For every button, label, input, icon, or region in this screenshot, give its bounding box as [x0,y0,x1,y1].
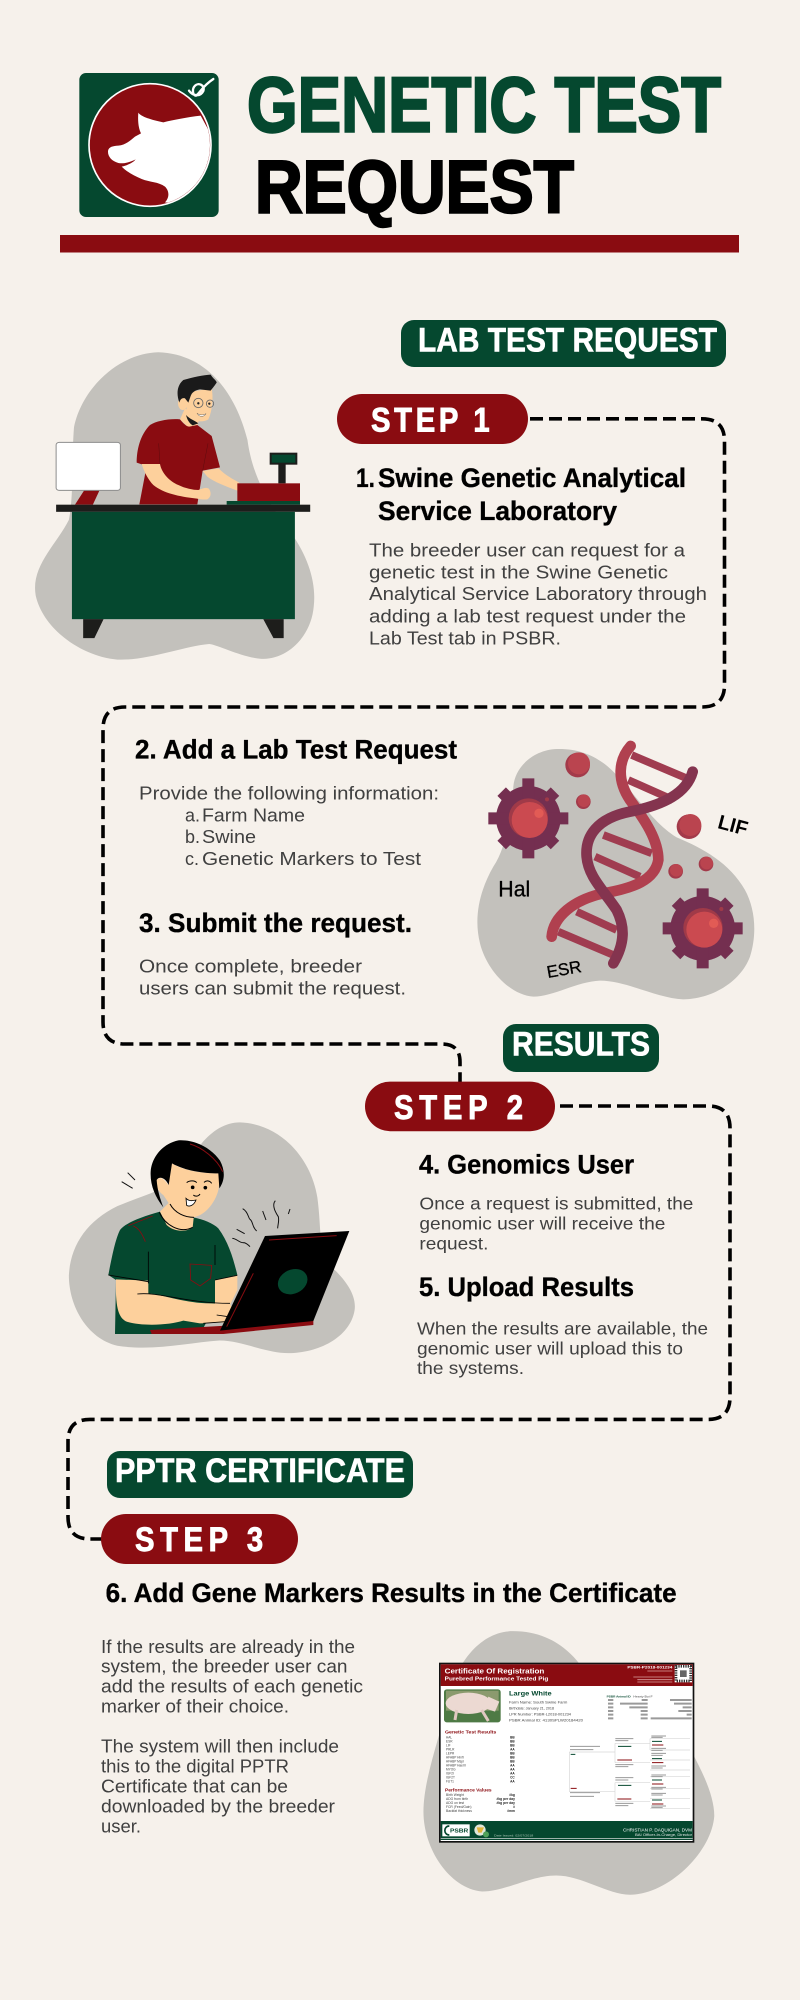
step 1 badge: STEP 1 [371,400,490,439]
step 2 text: request. [419,1234,488,1254]
certificate image: # [513,1805,515,1809]
certificate image: CC [510,1776,515,1780]
certificate image: HFABP HinfI [446,1756,464,1760]
certificate image: #mm [507,1809,515,1813]
step 2 add request text: c. [185,848,199,869]
step 2 text: 4. Genomics User [419,1150,634,1180]
step 3 badge [101,1514,298,1564]
step 2 text: genomic user will receive the [419,1214,665,1234]
logo: pig in circle [79,73,219,217]
step 2 add request text: 2. Add a Lab Test Request [135,734,457,764]
certificate image: IGF2I [446,1772,454,1776]
certificate image: BAI Officer-In-Charge, Director [635,1833,693,1837]
certificate image: AA [510,1764,515,1768]
certificate image: HFABP HaeIII [446,1764,466,1768]
step 2 add request text: Once complete, breeder [139,955,362,976]
certificate image: Performance Values [445,1788,492,1793]
step 3 text: downloaded by the breeder [101,1795,335,1816]
step 1 text [356,463,707,648]
certificate image: IGF2T [446,1776,455,1780]
certificate image: PSBR [450,1829,468,1835]
certificate image: BB [510,1752,515,1756]
certificate image: FUT1 [446,1780,454,1784]
step 3 badge: STEP 3 [135,1520,263,1559]
certificate image: BB [510,1740,515,1744]
certificate image: BB [510,1756,515,1760]
step 3 text: system, the breeder user can [101,1656,348,1677]
certificate image: Birthdate: January 21, 2018 [509,1706,554,1710]
step 1 text: Analytical Service Laboratory through [369,583,707,604]
illustration: user at desk [35,352,314,660]
certificate image: BB [510,1736,515,1740]
step 2 text: When the results are available, the [417,1318,708,1338]
certificate image: BB [510,1744,515,1748]
certificate image: Purebred Performance Tested Pig [445,1677,549,1683]
certificate image: Date Issued: 02/07/2018 [494,1833,534,1837]
certificate image: AA [510,1780,515,1784]
step 1 text: The breeder user can request for a [369,539,686,560]
dashed flow line [68,419,730,1539]
step 2 text: 5. Upload Results [419,1272,634,1302]
certificate image: MYOG [446,1768,456,1772]
illustration: DNA and gears: ESR [545,957,583,982]
step 3 text: If the results are already in the [101,1636,355,1657]
certificate image: #kg per day [496,1797,515,1801]
certificate image: LIF [446,1744,451,1748]
certificate image: HAL [446,1736,452,1740]
illustration: genomics user with laptop [69,1122,355,1353]
step 2 add request text: 3. Submit the request. [139,908,412,938]
certificate image: Farm Name: South Swine Farm [509,1700,567,1704]
certificate image: ADG from birth [446,1797,468,1801]
certificate image: Birth Weight [446,1793,464,1797]
certificate image: LEPR [446,1752,455,1756]
certificate image: AA [510,1748,515,1752]
step 1 text: 1. [356,463,375,493]
certificate image: AA [510,1772,515,1776]
step 1 text: Swine Genetic Analytical [378,463,686,493]
step 3 text [101,1636,363,1836]
certificate image: Backfat thickness [446,1809,472,1813]
step 3 heading: 6. Add Gene Markers Results in the Certificate [106,1578,677,1608]
certificate image: Genetic Test Results [445,1730,497,1735]
certificate image: ADG on test [446,1801,464,1805]
step 3 text: user. [101,1816,141,1836]
step 2 text: genomic user will upload this to [417,1338,683,1358]
step 2 add request text: Genetic Markers to Test [202,848,421,869]
step 2 text [417,1150,708,1378]
certificate image: PSBR-P2018-001234 [627,1665,673,1670]
certificate image: #kg [509,1793,515,1797]
illustration: DNA and gears: Hal [498,877,530,902]
step 3 text: this to the digital PPTR [101,1756,289,1777]
certificate image: PSBR Animal ID [607,1694,631,1698]
title divider bar [60,235,739,252]
certificate image: Certificate Of Registration [445,1666,545,1675]
step 2 text: Once a request is submitted, the [419,1194,693,1214]
step 2 text: the systems. [417,1358,524,1378]
step 1 text: adding a lab test request under the [369,606,686,626]
results heading: RESULTS [512,1026,650,1064]
step 1 text: genetic test in the Swine Genetic [369,561,668,582]
step 2 add request text: b. [185,826,200,847]
certificate image: Hearty Boi F [633,1694,653,1698]
certificate image [439,1663,694,1843]
panel: lab test request heading: LAB TEST REQUEST [418,322,717,360]
certificate image: FCR (Feed/Gain) [446,1805,472,1809]
step 2 add request text: users can submit the request. [139,977,406,998]
certificate image: PSBR Animal ID: 4130SPLW20184420 [509,1719,583,1723]
certificate image: AA [510,1768,515,1772]
step 3 text: add the results of each genetic [101,1676,363,1697]
certificate image: CHRISTIAN P. DAQUIGAN, DVM [623,1827,692,1832]
step 3 text: marker of their choice. [101,1695,289,1716]
certificate image: HFABP MspI [446,1760,464,1764]
certificate backdrop blob [423,1631,714,1895]
step 2 add request text [135,734,457,998]
step 3 text: Certificate that can be [101,1775,288,1796]
step 2 add request text: a. [185,804,200,825]
certificate image: Large White [509,1691,552,1698]
title: GENETIC TEST [247,61,721,149]
illustration: DNA and gears [477,746,754,999]
certificate image: BB [510,1760,515,1764]
certificate image: PRLR [446,1748,455,1752]
step 2 add request text: Provide the following information: [139,782,439,803]
step 3 text: The system will then include [101,1736,339,1756]
title [247,61,721,228]
step 2 add request text: Swine [202,826,256,847]
certificate image: LPR Number: PSBR-L2018-001234 [509,1713,571,1717]
step 2 badge [365,1082,555,1131]
step 1 badge [337,394,528,444]
illustration: DNA and gears: LIF [715,811,750,840]
step 2 badge: STEP 2 [394,1088,523,1127]
certificate image: #kg per day [496,1801,515,1805]
step 2 add request text: Farm Name [202,804,305,825]
PPTR certificate heading: PPTR CERTIFICATE [115,1452,405,1490]
step 1 text: Lab Test tab in PSBR. [369,627,561,648]
title: REQUEST [255,145,574,228]
step 1 text: Service Laboratory [378,496,617,526]
certificate image: ESR [446,1740,453,1744]
